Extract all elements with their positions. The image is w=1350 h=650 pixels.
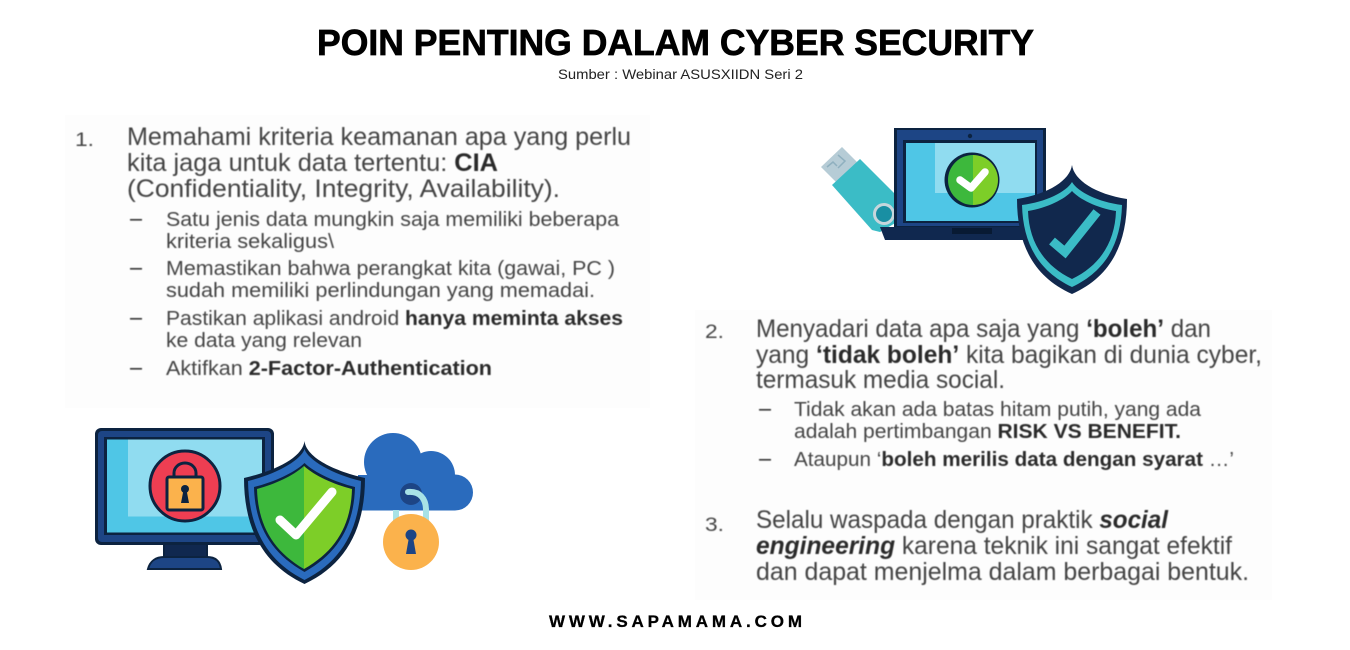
panel: points 2 and 3: 2. [705,322,724,343]
title: POIN PENTING DALAM CYBER SECURITY [317,22,1034,63]
panel: points 2 and 3: Selalu waspada dengan praktik social [756,506,1169,534]
panel: point 1: sudah memiliki perlindungan yang memadai. [166,279,595,302]
panel: points 2 and 3: Tidak akan ada batas hitam putih, yang ada [794,398,1202,421]
panel: point 1: kriteria sekaligus\ [166,230,334,253]
panel: points 2 and 3: termasuk media social. [756,366,1005,394]
icon: navy shield with check [1017,165,1127,294]
icon: usb drive [821,147,897,232]
icon: desktop monitor with padlock [95,428,274,569]
panel: point 1 [65,115,650,408]
panel: point 1: 1. [75,130,94,151]
panel: points 2 and 3: Ataupun ‘boleh merilis data dengan syarat …’ [794,448,1234,471]
panel: points 2 and 3 [695,310,1272,600]
illustration: monitor, shield and cloud lock [95,428,473,584]
icon: cloud with padlock [358,433,473,570]
panel: point 1: Aktifkan 2-Factor-Authentication [166,357,492,380]
panel: points 2 and 3: engineering karena teknik ini sangat efektif [756,532,1232,560]
illustration: laptop, usb and shield [821,128,1127,294]
panel: point 1: ke data yang relevan [166,329,362,352]
icon: green shield with check [244,441,365,584]
panel: points 2 and 3: dan dapat menjelma dalam berbagai bentuk. [756,558,1249,586]
panel: point 1: Memastikan bahwa perangkat kita (gawai, PC ) [166,257,615,280]
subtitle: source: Sumber : Webinar ASUSXIIDN Seri 2 [558,66,803,82]
panel: point 1: Pastikan aplikasi android hanya meminta akses [166,307,623,330]
panel: point 1: Memahami kriteria keamanan apa yang perlu [127,123,631,151]
panel: points 2 and 3: adalah pertimbangan RISK VS BENEFIT. [794,420,1181,443]
icon: laptop [880,128,1046,240]
panel: points 2 and 3: yang ‘tidak boleh’ kita bagikan di dunia cyber, [756,341,1262,369]
footer: website: WWW.SAPAMAMA.COM [549,612,802,631]
panel: point 1: kita jaga untuk data tertentu: CIA [127,149,498,177]
panel: points 2 and 3: 3. [705,515,724,536]
panel: point 1: (Confidentiality, Integrity, Availability). [127,175,560,203]
panel: point 1: Satu jenis data mungkin saja memiliki beberapa [166,208,620,231]
panel: points 2 and 3: Menyadari data apa saja yang ‘boleh’ dan [756,315,1211,343]
